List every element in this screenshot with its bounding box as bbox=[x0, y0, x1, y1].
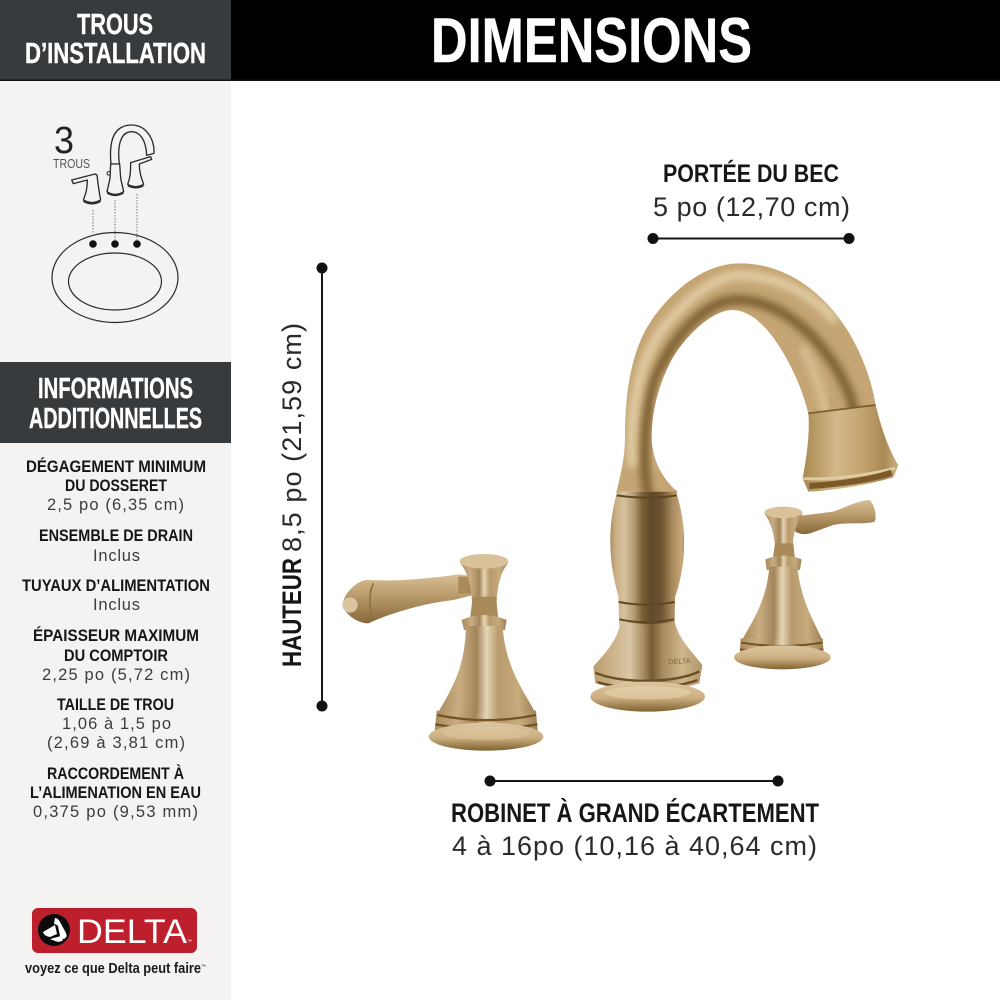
text block: minimum backsplash clearance: 2,5 po (6,35 cm) bbox=[47, 496, 184, 514]
base rings bbox=[590, 666, 705, 712]
spout head bbox=[803, 405, 898, 492]
text block: supply lines: Inclus bbox=[93, 596, 140, 614]
text block: supply lines: TUYAUX D’ALIMENTATION bbox=[22, 577, 210, 595]
text block: supply lines bbox=[22, 577, 210, 614]
text block: drain assembly: ENSEMBLE DE DRAIN bbox=[39, 527, 193, 545]
text block: minimum backsplash clearance: DU DOSSERET bbox=[65, 477, 167, 495]
text block: maximum counter thickness bbox=[33, 626, 199, 684]
text block: hole size: (2,69 à 3,81 cm) bbox=[47, 734, 185, 752]
faucet body bbox=[593, 491, 702, 683]
text block: minimum backsplash clearance: DÉGAGEMENT MINIMUM bbox=[26, 457, 206, 476]
text block: water connection: RACCORDEMENT À bbox=[47, 764, 184, 783]
icon: three hole sink diagram: 3 bbox=[54, 120, 74, 162]
text block: maximum counter thickness: ÉPAISSEUR MAXIMUM bbox=[33, 626, 199, 645]
heading: additional information: ADDITIONNELLES bbox=[29, 403, 202, 435]
dimension: spout reach: 5 po (12,70 cm) bbox=[653, 192, 850, 222]
dimension: height bbox=[277, 262, 328, 712]
dimension: height: HAUTEUR bbox=[277, 558, 307, 667]
header: left heading band: D’INSTALLATION bbox=[25, 38, 206, 70]
dimension: widespread faucet: 4 à 16po (10,16 à 40,64 cm) bbox=[452, 831, 817, 861]
text block: hole size bbox=[47, 696, 185, 752]
text block: maximum counter thickness: DU COMPTOIR bbox=[64, 647, 168, 665]
dimension: widespread faucet bbox=[451, 776, 819, 861]
text block: hole size: TAILLE DE TROU bbox=[57, 696, 174, 714]
body logo: DELTA bbox=[668, 656, 691, 666]
text block: minimum backsplash clearance bbox=[26, 457, 206, 514]
header: left heading band: TROUS bbox=[77, 9, 153, 41]
text block: water connection: 0,375 po (9,53 mm) bbox=[33, 803, 198, 821]
text block: maximum counter thickness: 2,25 po (5,72 cm) bbox=[42, 666, 190, 684]
logo: delta: ™ bbox=[201, 964, 206, 970]
heading: additional information bbox=[0, 362, 231, 443]
icon: three hole sink diagram bbox=[52, 120, 178, 322]
dimension: spout reach: PORTÉE DU BEC bbox=[663, 159, 839, 188]
text block: drain assembly bbox=[39, 527, 193, 565]
title: dimensions band: DIMENSIONS bbox=[431, 6, 752, 76]
logo: delta: DELTA bbox=[77, 913, 187, 951]
logo: delta: ™ bbox=[187, 939, 192, 945]
spout tube bbox=[617, 263, 876, 497]
dimension: spout reach bbox=[648, 159, 854, 244]
text block: water connection bbox=[30, 764, 201, 821]
text block: hole size: 1,06 à 1,5 po bbox=[62, 715, 171, 733]
stem and bell bbox=[429, 554, 543, 751]
illustration: gold faucet spout, body and right handle bbox=[590, 263, 898, 712]
text block: drain assembly: Inclus bbox=[93, 547, 140, 565]
right handle bbox=[734, 500, 876, 669]
logo: delta: voyez ce que Delta peut faire bbox=[25, 960, 201, 977]
dimension: widespread faucet: ROBINET À GRAND ÉCARTEMENT bbox=[451, 797, 819, 828]
text block: water connection: L’ALIMENATION EN EAU bbox=[30, 784, 201, 802]
heading: additional information: INFORMATIONS bbox=[38, 373, 193, 405]
logo: delta bbox=[25, 908, 206, 977]
title: dimensions band bbox=[231, 0, 1000, 80]
illustration: gold faucet left handle bbox=[342, 554, 543, 751]
icon: three hole sink diagram: TROUS bbox=[53, 156, 90, 171]
dimension: height: 8,5 po (21,59 cm) bbox=[277, 323, 307, 552]
lever bbox=[342, 574, 480, 623]
header: left heading band bbox=[0, 0, 231, 80]
panel: sidebar background bbox=[0, 80, 231, 1000]
